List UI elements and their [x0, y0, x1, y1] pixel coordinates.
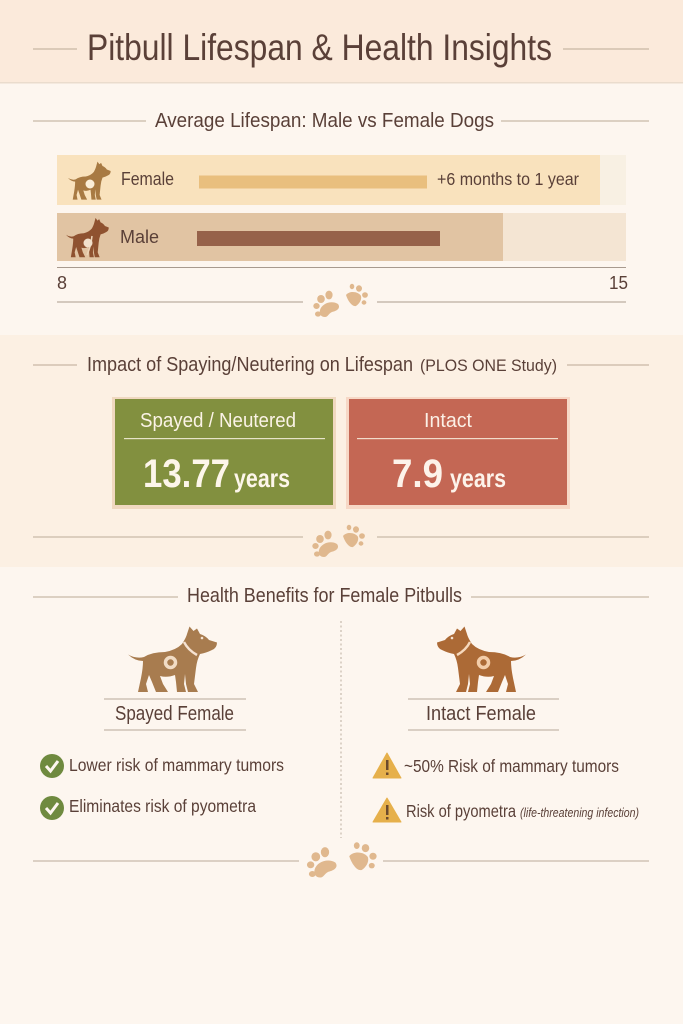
card: spayed neutered: Spayed / Neutered	[140, 410, 296, 432]
axis	[57, 268, 628, 293]
axis label: 15: 15	[609, 273, 628, 293]
icon: male dog	[66, 218, 109, 257]
column: spayed female	[40, 626, 284, 820]
icon: spayed dog	[128, 626, 217, 692]
heading: health benefits: Health Benefits for Female Pitbulls	[187, 585, 462, 607]
card: spayed neutered	[112, 397, 336, 509]
panel: average lifespan	[33, 110, 649, 317]
risk: pyometra: (life-threatening infection)	[520, 805, 639, 820]
benefit: pyometra: Eliminates risk of pyometra	[69, 796, 256, 816]
panel: health benefits	[33, 585, 649, 878]
icon: paw prints	[312, 525, 365, 557]
axis label: 8: 8	[57, 273, 67, 293]
heading: average lifespan: Average Lifespan: Male vs Female Dogs	[155, 110, 494, 132]
label: male: Male	[120, 227, 159, 247]
card: intact: years	[450, 463, 506, 493]
risk: mammary tumors: ~50% Risk of mammary tumors	[404, 756, 619, 776]
bar: male range	[197, 231, 440, 246]
panel: header	[0, 0, 683, 84]
column: intact female	[373, 626, 639, 822]
male bar row	[57, 213, 626, 261]
card: intact: Intact	[424, 410, 472, 432]
benefit: mammary tumors: Lower risk of mammary tumors	[69, 755, 284, 775]
card: spayed neutered: years	[234, 463, 290, 493]
heading: spaying impact: Impact of Spaying/Neutering on Lifespan	[87, 354, 413, 376]
female bar row	[57, 155, 626, 205]
label: spayed female: Spayed Female	[115, 703, 234, 725]
icon: paw prints	[313, 284, 368, 317]
benefit: pyometra	[40, 796, 256, 820]
title: Pitbull Lifespan & Health Insights	[87, 27, 552, 68]
risk: mammary tumors	[373, 753, 619, 778]
card: spayed neutered: 13.77	[143, 452, 230, 496]
icon: paw prints	[307, 842, 377, 878]
icon: intact dog	[437, 626, 526, 692]
risk: pyometra: Risk of pyometra	[406, 801, 516, 821]
bar: female range	[199, 176, 427, 188]
heading: spaying impact: (PLOS ONE Study)	[420, 357, 557, 375]
panel: spaying impact	[0, 335, 683, 567]
card: intact	[346, 397, 570, 509]
label: female: Female	[121, 169, 174, 189]
benefit: mammary tumors	[40, 754, 284, 778]
label: intact female: Intact Female	[426, 703, 536, 725]
card: intact: 7.9	[392, 452, 443, 496]
risk: pyometra	[373, 798, 639, 822]
icon: female dog	[68, 162, 111, 200]
label: female difference: +6 months to 1 year	[437, 169, 579, 189]
